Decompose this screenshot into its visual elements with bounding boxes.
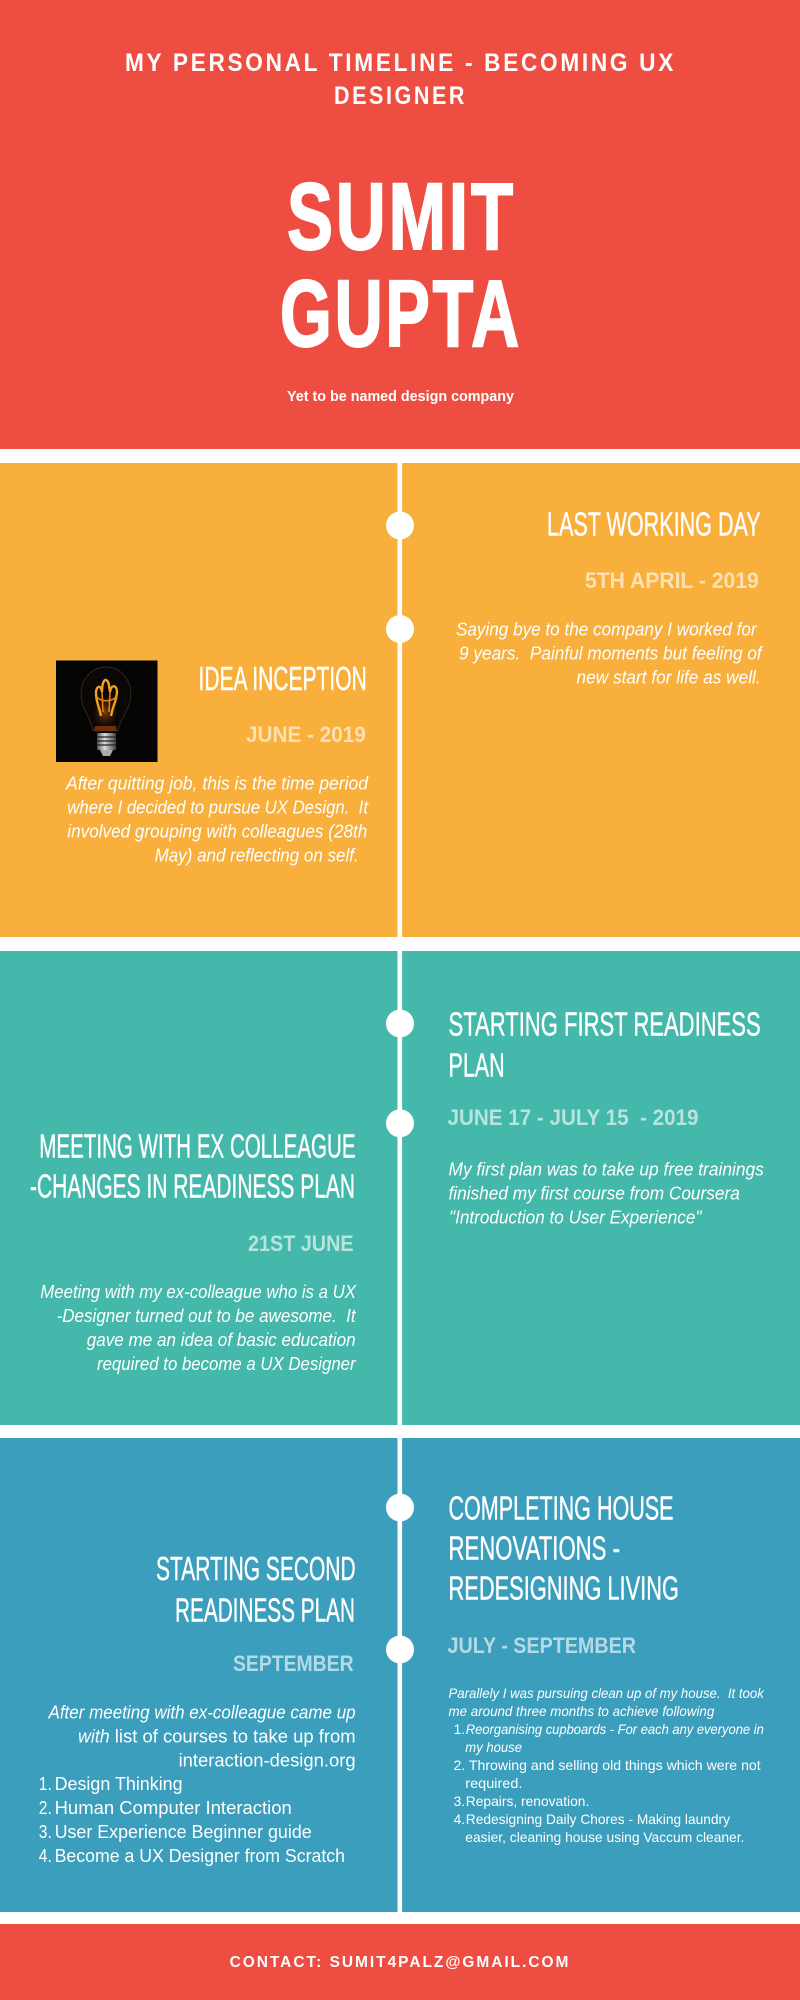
- company subtitle: Yet to be named design company: [287, 389, 514, 405]
- event: meeting with ex colleague: required to become a UX Designer: [97, 1354, 357, 1374]
- icon: light bulb photo: [56, 660, 158, 762]
- event: completing house renovations: REDESIGNING LIVING: [448, 1570, 679, 1606]
- panel: blue section: [0, 1438, 800, 1912]
- event: idea inception: involved grouping with colleagues (28th: [67, 821, 367, 841]
- event: last working day: 5TH APRIL - 2019: [585, 568, 759, 593]
- event: completing house renovations: [448, 1490, 765, 1845]
- event: last working day: Saying bye to the company I worked for: [456, 619, 758, 639]
- event: starting first readiness plan: finished my first course from Coursera: [448, 1183, 740, 1203]
- event: starting second readiness plan: with: [78, 1726, 110, 1746]
- event: meeting with ex colleague: MEETING WITH EX COLLEAGUE: [39, 1127, 356, 1164]
- name heading: GUPTA: [280, 261, 522, 367]
- event: completing house renovations: required.: [465, 1776, 522, 1791]
- event: completing house renovations: me around three months to achieve following: [448, 1704, 715, 1719]
- event: starting second readiness plan: READINESS PLAN: [175, 1592, 355, 1629]
- event: completing house renovations: Repairs, renovation.: [466, 1794, 589, 1809]
- event: idea inception: After quitting job, this is the time period: [65, 773, 369, 793]
- event: starting second readiness plan: 1.: [39, 1774, 52, 1794]
- event: starting first readiness plan: [448, 1006, 764, 1227]
- event: last working day: [456, 506, 764, 687]
- event: starting second readiness plan: 2.: [39, 1798, 52, 1818]
- event: starting second readiness plan: Design Thinking: [55, 1774, 183, 1794]
- event: starting second readiness plan: 4.: [39, 1846, 52, 1866]
- event: completing house renovations: Parallely I was pursuing clean up of my house. It took: [448, 1686, 765, 1701]
- event: starting first readiness plan: "Introduction to User Experience": [449, 1207, 703, 1227]
- event: starting first readiness plan: JUNE 17 - JULY 15 - 2019: [448, 1105, 698, 1130]
- event: meeting with ex colleague: [30, 1127, 357, 1374]
- contact line: CONTACT: SUMIT4PALZ@GMAIL.COM: [230, 1954, 570, 1971]
- event: meeting with ex colleague: gave me an idea of basic education: [87, 1330, 356, 1350]
- event: completing house renovations: Redesigning Daily Chores - Making laundry: [466, 1812, 730, 1827]
- panel: footer: [0, 1924, 800, 2000]
- event: starting first readiness plan: My first plan was to take up free trainings: [448, 1159, 764, 1179]
- event: completing house renovations: 2.: [454, 1758, 465, 1773]
- event: last working day: 9 years. Painful moments but feeling of: [459, 643, 764, 663]
- event: starting second readiness plan: After meeting with ex-colleague came up: [48, 1702, 356, 1722]
- event: starting second readiness plan: list of courses to take up from: [115, 1726, 356, 1746]
- event: starting first readiness plan: PLAN: [448, 1047, 505, 1084]
- event: meeting with ex colleague: -CHANGES IN READINESS PLAN: [30, 1168, 355, 1205]
- event: last working day: new start for life as well.: [576, 667, 761, 687]
- title: MY PERSONAL TIMELINE - BECOMING UX: [125, 49, 676, 77]
- event: starting second readiness plan: 3.: [39, 1822, 52, 1842]
- event: starting second readiness plan: interaction-design.org: [179, 1750, 356, 1770]
- event: starting second readiness plan: SEPTEMBER: [233, 1651, 354, 1676]
- event: idea inception: where I decided to pursue UX Design. It: [67, 797, 369, 817]
- event: starting second readiness plan: [39, 1550, 356, 1866]
- event: completing house renovations: Throwing and selling old things which were not: [469, 1758, 761, 1773]
- event: completing house renovations: Reorganising cupboards - For each any everyone in: [466, 1722, 764, 1737]
- event: idea inception: IDEA INCEPTION: [198, 660, 367, 697]
- event: completing house renovations: 4.: [454, 1812, 465, 1827]
- panel: header: [0, 0, 800, 449]
- event: starting second readiness plan: Become a UX Designer from Scratch: [55, 1846, 345, 1866]
- event: completing house renovations: my house: [465, 1740, 522, 1755]
- event: idea inception: JUNE - 2019: [246, 722, 366, 747]
- timeline spine with dots: [386, 463, 414, 1912]
- event: completing house renovations: COMPLETING HOUSE: [448, 1490, 674, 1526]
- event: completing house renovations: easier, cleaning house using Vaccum cleaner.: [465, 1830, 744, 1845]
- event: meeting with ex colleague: -Designer turned out to be awesome. It: [57, 1306, 357, 1326]
- name heading: [280, 164, 522, 367]
- event: meeting with ex colleague: 21ST JUNE: [248, 1231, 354, 1256]
- event: completing house renovations: RENOVATIONS -: [448, 1530, 620, 1566]
- event: meeting with ex colleague: Meeting with my ex-colleague who is a UX: [40, 1282, 357, 1302]
- event: starting second readiness plan: STARTING SECOND: [156, 1550, 356, 1587]
- event: completing house renovations: JULY - SEPTEMBER: [448, 1633, 636, 1658]
- name heading: SUMIT: [287, 164, 516, 270]
- event: idea inception: [65, 660, 369, 865]
- panel: teal section: [0, 951, 800, 1425]
- event: completing house renovations: 3.: [454, 1794, 465, 1809]
- title: [125, 49, 676, 110]
- event: starting second readiness plan: Human Computer Interaction: [55, 1798, 292, 1818]
- panel: orange section: [0, 463, 800, 937]
- title: DESIGNER: [334, 82, 467, 110]
- event: completing house renovations: 1.: [454, 1722, 465, 1737]
- event: starting second readiness plan: User Experience Beginner guide: [55, 1822, 312, 1842]
- event: idea inception: May) and reflecting on self.: [155, 845, 359, 865]
